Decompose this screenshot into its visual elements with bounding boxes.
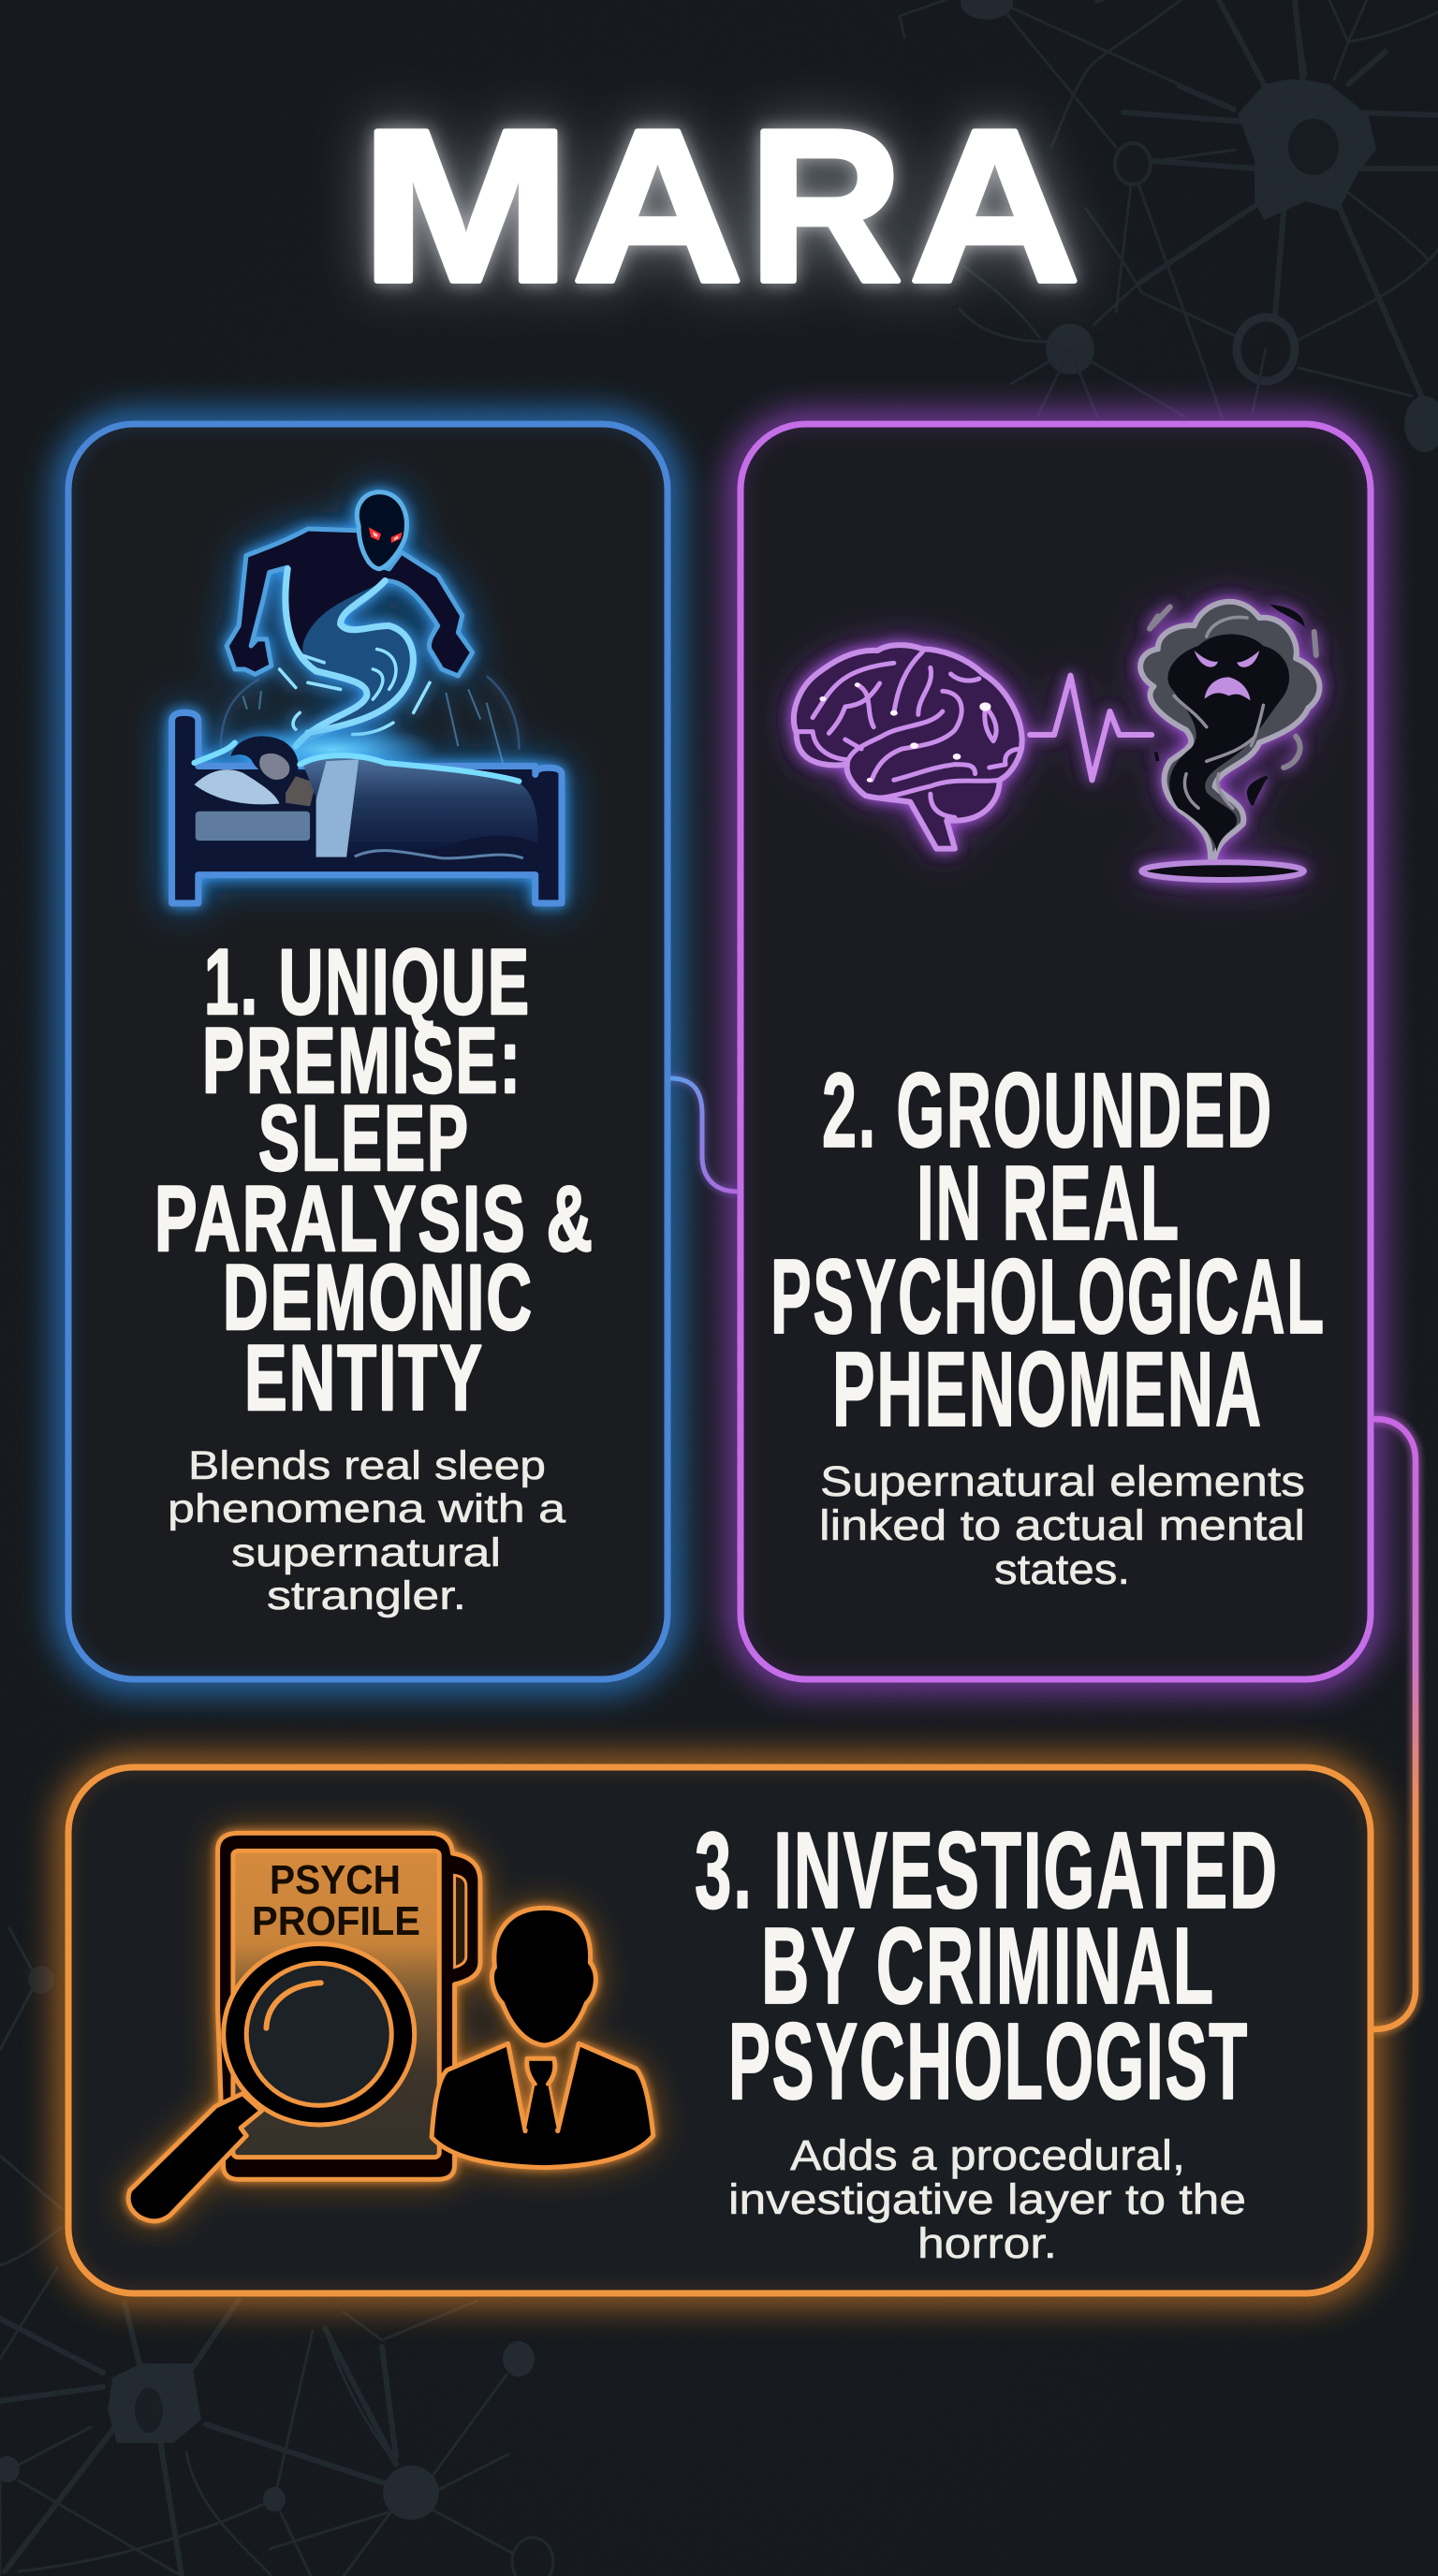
demon body: [227, 529, 473, 746]
heading 1: DEMONIC: [223, 1245, 534, 1349]
heading 1: SLEEP: [258, 1086, 470, 1190]
description 3: investigative layer to the: [728, 2175, 1246, 2223]
description 1: [168, 1443, 565, 1618]
heading 1: PARALYSIS &: [154, 1166, 594, 1270]
connector: panel 2 to panel 3: [1373, 1419, 1416, 2029]
pillow: [194, 769, 280, 804]
panel 1: unique premise: [68, 424, 668, 1679]
title: [360, 85, 1080, 328]
heading 2: [770, 1051, 1326, 1448]
description 2: Supernatural elements: [820, 1457, 1305, 1505]
heading 2: IN REAL: [917, 1144, 1181, 1262]
description 1: phenomena with a: [168, 1486, 565, 1531]
icon: brain, pulse and smoke demon: [794, 602, 1319, 880]
description 2: states.: [994, 1545, 1130, 1593]
brain synapse lights: [819, 682, 990, 783]
magnifier lens: [224, 1944, 415, 2125]
sheet fold: [316, 759, 359, 857]
bed light: [227, 724, 438, 774]
portal: [1141, 862, 1304, 880]
heading 1: 1. UNIQUE: [204, 929, 531, 1033]
description 3: [728, 2131, 1246, 2267]
description 3: Adds a procedural,: [790, 2131, 1185, 2179]
blanket: [304, 758, 537, 860]
sleeper: [230, 736, 299, 782]
magnifier handle: [128, 2094, 262, 2221]
title: A: [572, 85, 743, 328]
title: A: [909, 85, 1080, 328]
description 1: Blends real sleep: [188, 1443, 546, 1488]
neuron network: top right: [900, 0, 1438, 452]
description 3: horror.: [917, 2219, 1057, 2267]
description 2: [819, 1457, 1305, 1593]
pulse line: [1030, 676, 1152, 780]
psych profile label: PSYCH: [270, 1857, 401, 1903]
psych profile label: PROFILE: [252, 1898, 420, 1944]
description 1: supernatural: [231, 1530, 501, 1575]
folder: [218, 1833, 480, 2179]
psych profile label: [252, 1857, 420, 1944]
mattress: [196, 812, 310, 841]
title: M: [360, 85, 571, 328]
demon eyes: [369, 527, 403, 543]
heading 1: PREMISE:: [202, 1008, 522, 1112]
icon: demon over sleeping person in bed: [172, 492, 562, 903]
brain: [794, 645, 1022, 849]
title: R: [749, 85, 902, 328]
panel 2: grounded in real phenomena: [741, 424, 1371, 1679]
heading 1: [154, 929, 594, 1429]
smoke cloud: [1140, 602, 1319, 858]
person suit: [432, 2043, 653, 2168]
panel 3: investigated by criminal psychologist: [68, 1767, 1371, 2293]
demon head: [357, 492, 406, 569]
description 1: strangler.: [267, 1573, 466, 1618]
heading 3: [695, 1809, 1279, 2122]
heading 1: ENTITY: [244, 1325, 484, 1429]
bed frame: [172, 712, 562, 903]
icon: psych profile, magnifier and silhouette: [128, 1833, 653, 2221]
ghost wisp: [302, 580, 413, 733]
smoke demon face: [1195, 651, 1259, 700]
connector: panel 1 to panel 2: [670, 1078, 738, 1192]
neuron network: bottom left: [0, 1928, 553, 2576]
description 2: linked to actual mental: [819, 1501, 1305, 1549]
person head: [492, 1908, 595, 2045]
